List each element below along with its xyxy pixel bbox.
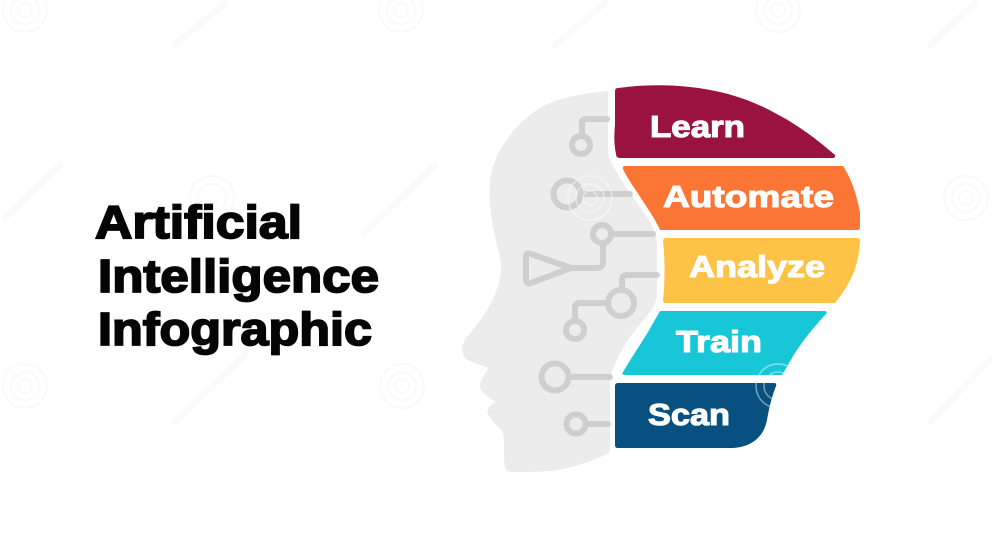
circuit: triangle and node — [526, 225, 653, 284]
title: Infographic — [98, 303, 372, 355]
segment: Scan: Scan — [648, 397, 730, 432]
title — [95, 196, 379, 355]
segment: Train — [622, 311, 827, 375]
segment: Automate: Automate — [663, 179, 834, 214]
circuit: large upper node — [554, 180, 630, 208]
segment: Analyze — [663, 238, 860, 303]
circuit: bottom node — [566, 414, 608, 434]
segment: Analyze: Analyze — [689, 249, 825, 284]
title: Artificial — [95, 196, 302, 248]
segment: Automate — [623, 166, 860, 230]
head silhouette — [462, 91, 657, 472]
segment: Learn: Learn — [650, 109, 745, 144]
circuit: top node — [572, 119, 607, 154]
title: Intelligence — [98, 250, 379, 302]
circuit: middle node — [566, 275, 657, 339]
segment: Learn — [614, 85, 835, 158]
circuit: lower large node — [542, 364, 610, 390]
segment: Scan — [615, 383, 776, 448]
segment: Train: Train — [676, 324, 762, 359]
circuit lines — [526, 119, 657, 434]
